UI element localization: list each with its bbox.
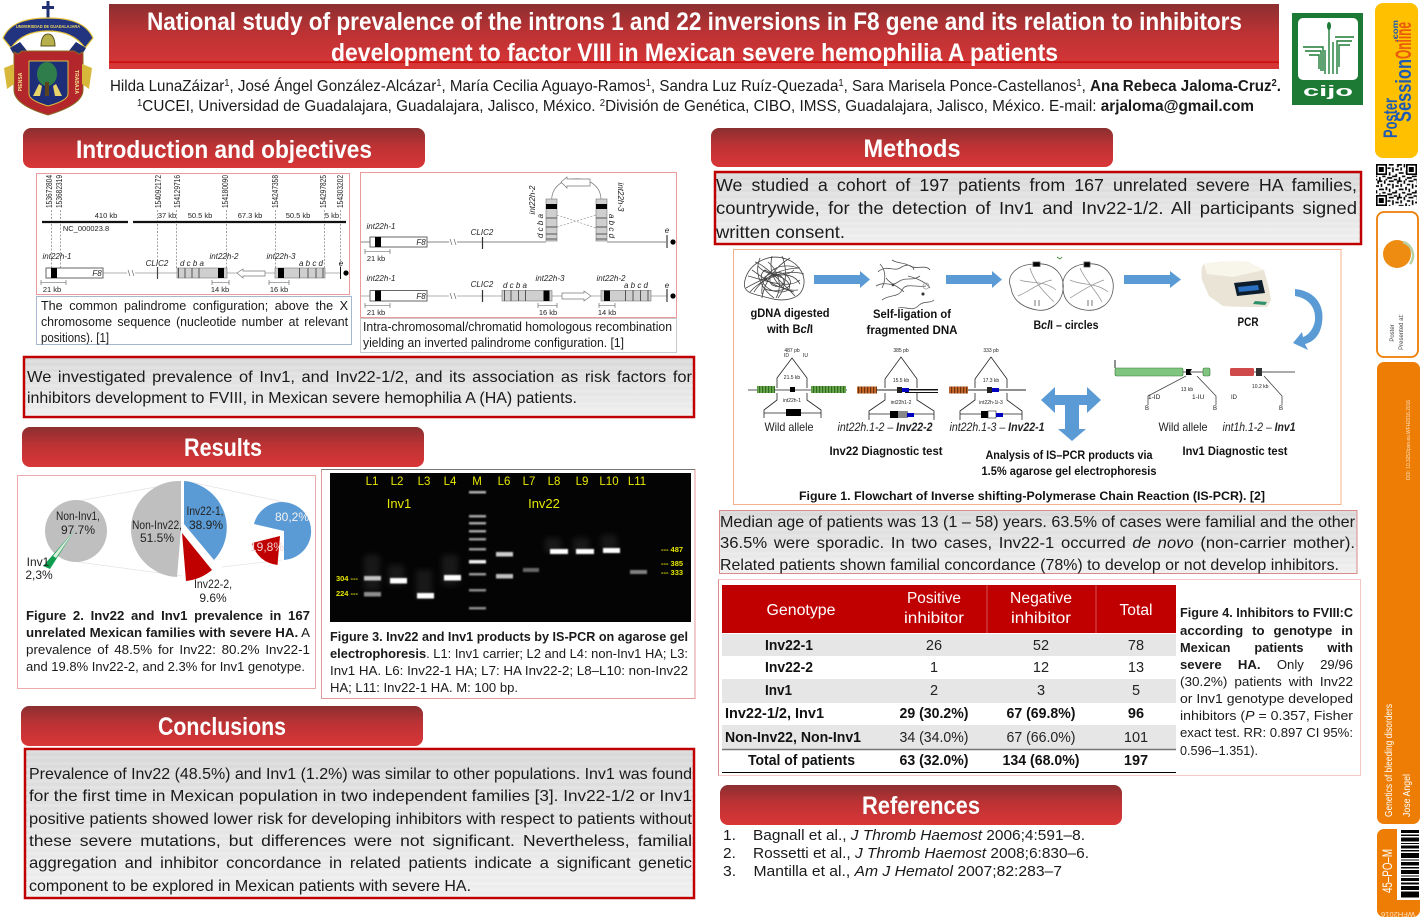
diagram labels: Analysis of IS–PCR products via <box>986 448 1153 462</box>
authors and affiliations: 1 <box>224 78 230 89</box>
figure 2 caption: Figure 2. Inv22 and Inv1 prevalence in 167 <box>26 608 310 623</box>
figure 4 caption: severe HA. Only 29/96 <box>1180 658 1353 672</box>
figure 1 panel: IS-PCR flowchart <box>734 250 1341 504</box>
tangled gDNA <box>744 256 804 300</box>
nucleotide positions: 153682319 <box>55 175 64 208</box>
diagram: Inv1 wild allele: 1-ID <box>1148 394 1161 401</box>
figure: common palindrome configuration: d c b a <box>180 259 205 268</box>
diagram: Inv22 wild allele: 487 pb <box>784 348 800 354</box>
objectives box: We investigated prevalence of Inv1, and Inv22-1/2, and its association as risk factors for <box>27 369 693 386</box>
figure: common palindrome configuration: F8 <box>92 269 102 278</box>
figure: common palindrome configuration: CLIC2 <box>146 259 169 268</box>
step labels: Self-ligation of <box>873 307 952 321</box>
figure 4 caption: according to genotype in <box>1180 624 1353 638</box>
figure 3 caption <box>330 629 688 695</box>
nucleotide positions: 154092172 <box>154 175 163 208</box>
heading: Methods <box>711 128 1113 167</box>
diagram: Inv22 wild allele: 21.5 kb <box>784 375 800 381</box>
gel image: L8 <box>548 476 560 488</box>
fragmented DNA <box>876 260 934 309</box>
sidebar: session information: DOI: 10.3252/pso.eu.WFH2016.2016 <box>1406 400 1412 480</box>
gel image: --- 385 <box>661 559 683 568</box>
pie: Inv1 prevalence: Non-Inv1, <box>56 509 100 523</box>
caption: common palindrome: chromosome sequence (nucleotide number at relevant <box>41 315 349 329</box>
figure: inverted palindrome recombination: 21 kb <box>367 254 385 263</box>
figure 4 caption: Mexican patients with <box>1180 641 1353 655</box>
figure 4 caption: exact test. RR: 0.897 CI 95%: <box>1180 726 1353 740</box>
methods box: written consent. <box>715 222 845 242</box>
badge: PosterSessionOnline <box>1375 3 1418 158</box>
badge: PosterSessionOnline: Session <box>1391 59 1416 122</box>
figure: common palindrome configuration: int22h-3 <box>267 252 296 261</box>
heading: Results <box>22 427 424 467</box>
gel image: 224 --- <box>336 589 359 598</box>
figure: inverted palindrome recombination: 14 kb <box>598 308 616 317</box>
table rows: 78 <box>1128 638 1144 654</box>
gel image: Inv22 <box>528 496 560 511</box>
authors and affiliations: 1 <box>436 78 442 89</box>
caption: inverted palindrome: Intra-chromosomal/chromatid homologous recombination <box>363 320 672 334</box>
reference list: 3. Mantilla et al., Am J Hematol 2007;82:283–7 <box>723 863 1062 880</box>
table rows: Inv1 <box>765 683 792 699</box>
gel image: L9 <box>576 476 588 488</box>
figure: inverted palindrome recombination <box>360 172 676 318</box>
table rows: Total of patients <box>748 753 855 769</box>
table rows: 26 <box>926 638 942 654</box>
table rows: 13 <box>1128 660 1144 676</box>
diagram labels: Inv22 Diagnostic test <box>830 444 942 458</box>
table header <box>722 585 1176 633</box>
table header: Genotype <box>766 602 836 619</box>
pie: Inv22 subtypes: 80,2% <box>275 510 309 524</box>
gel image: L10 <box>599 476 619 488</box>
logo: Universidad de Guadalajara shield <box>3 1 93 115</box>
figure 3 caption: Figure 3. Inv22 and Inv1 products by IS-PCR on agarose gel <box>330 629 688 644</box>
table rows: 29 (30.2%) <box>900 706 969 722</box>
pie: Inv1 prevalence: Inv1 <box>27 555 50 569</box>
diagram: Inv1 inverted: B <box>1279 406 1283 412</box>
diagram labels: int22h.1-3 – Inv22-1 <box>950 420 1045 434</box>
figure: common palindrome configuration: 21 kb <box>43 285 61 294</box>
authors and affiliations: 2 <box>600 98 606 109</box>
PCR machine <box>1201 261 1271 307</box>
figure: inverted palindrome recombination: int22h-2 <box>597 274 626 283</box>
figure: common palindrome configuration: 50.5 kb <box>286 211 310 220</box>
heading: Methods: Methods <box>864 135 960 163</box>
methods box: countrywide, for the detection of Inv1 and Inv22-1/2. All participants signed <box>716 198 1357 218</box>
table rows: 101 <box>1124 730 1148 746</box>
figure: inverted palindrome recombination: 16 kb <box>539 308 557 317</box>
nucleotide positions: 154180090 <box>221 175 230 208</box>
nucleotide positions: 154247358 <box>271 175 280 208</box>
logo: Universidad de Guadalajara shield: PIENSA <box>18 72 24 91</box>
figure 2 caption: and 19.8% Inv22-2, and 2.3% for Inv1 genotype. <box>26 659 305 674</box>
authors and affiliations: Ana Rebeca Jaloma-Cruz <box>1090 78 1272 95</box>
figure: inverted palindrome recombination: F8 <box>416 238 426 247</box>
nucleotide positions: 154129716 <box>173 175 182 208</box>
figure: inverted palindrome recombination: a b c d <box>607 214 616 239</box>
figure 4 caption: (30.2%) patients with Inv22 <box>1180 675 1353 689</box>
table rows: 3 <box>1037 683 1045 699</box>
figure 3 caption: electrophoresis. L1: Inv1 carrier; L2 and L4: non-Inv1 HA; L3: <box>330 646 688 661</box>
table rows: 197 <box>1124 753 1148 769</box>
table rows <box>722 634 1176 772</box>
pie: Inv22 prevalence <box>131 481 232 605</box>
diagram: Inv22 wild allele <box>748 348 847 418</box>
figure: inverted palindrome recombination: 21 kb <box>367 308 385 317</box>
figure 3 caption: Inv1 HA. L6: Inv22-1 HA; L7: HA Inv22-2; L8–L10: non-Inv22 <box>330 663 688 678</box>
authors and affiliations: , Sandra Luz Ruíz-Quezada <box>651 78 838 95</box>
gel image: L7 <box>523 476 535 488</box>
table rows: 67 (69.8%) <box>1006 706 1076 722</box>
pie: Inv22 subtypes: 19,8% <box>250 540 284 554</box>
gel image <box>330 473 691 622</box>
table header: Positive <box>907 590 961 607</box>
figure 4 caption <box>1180 606 1353 758</box>
figure 3 caption: HA; L11: Inv22-1 HA. M: 100 bp. <box>330 680 518 695</box>
pie: Inv1 prevalence: 2,3% <box>25 568 53 582</box>
badge: poster presented at <box>1377 212 1418 357</box>
step labels: with BclI <box>766 322 813 336</box>
figure 4 caption: Figure 4. Inhibitors to FVIII:C <box>1180 606 1353 620</box>
badge: PosterSessionOnline: Poster <box>1381 98 1402 138</box>
diagram: Inv22 wild allele: IU <box>803 353 808 359</box>
table rows: 12 <box>1033 660 1049 676</box>
caption: common palindrome: positions). [1] <box>41 331 109 345</box>
table rows: 2 <box>930 683 938 699</box>
figure 4 panel: genotype table <box>718 580 1360 776</box>
sidebar: poster code and barcode: WFH2016 <box>1381 910 1415 917</box>
pie: Inv22 prevalence: Inv22-2, <box>194 577 232 591</box>
figure: inverted palindrome recombination: F8 <box>416 292 426 301</box>
pie: Inv22 prevalence: 9.6% <box>199 591 227 605</box>
patient summary box <box>720 510 1357 574</box>
sidebar: session information <box>1377 362 1420 824</box>
diagram labels: int1h.1-2 – Inv1 <box>1222 420 1296 434</box>
arrow: T-shaped analysis arrow <box>1041 387 1101 441</box>
gel image: L1 <box>366 476 378 488</box>
diagram: Inv1 wild allele: B <box>1213 406 1217 412</box>
table rows: Inv22-1 <box>765 638 813 654</box>
authors and affiliations: arjaloma@gmail.com <box>1101 98 1254 115</box>
arrow: ligation to circles <box>946 271 1002 288</box>
logo: CIBO <box>1292 13 1363 105</box>
figure: common palindrome configuration: 16 kb <box>270 285 288 294</box>
figure 2 caption: unrelated Mexican families with severe HA. A <box>26 625 310 640</box>
objectives box: inhibitors development to FVIII, in Mexican severe hemophilia A (HA) patients. <box>27 390 577 407</box>
methods box <box>715 172 1361 244</box>
pie: Inv22 prevalence: Inv22-1, <box>186 504 224 518</box>
figure: inverted palindrome recombination: int22h-2 <box>528 185 537 214</box>
pie: Inv22 prevalence: 51.5% <box>140 531 174 545</box>
diagram: Inv22-2 <box>857 348 938 420</box>
diagram: Inv1 wild allele: 1-IU <box>1192 394 1205 401</box>
authors and affiliations: Hilda LunaZáizar <box>110 78 231 95</box>
heading: Results: Results <box>184 434 262 462</box>
table rows: Inv22-2 <box>765 660 813 676</box>
pie: Inv22 subtypes <box>250 502 311 565</box>
table rows: 67 (66.0%) <box>1006 730 1076 746</box>
nucleotide positions: 154303202 <box>336 175 345 208</box>
figure: inverted palindrome recombination: e <box>665 226 670 235</box>
diagram labels: Wild allele <box>764 420 814 434</box>
diagram: Inv22-1 <box>949 348 1026 420</box>
figure: inverted palindrome recombination: int22h-1 <box>367 222 395 231</box>
figure: common palindrome configuration: int22h-1 <box>43 252 71 261</box>
figure: inverted palindrome recombination: CLIC2 <box>471 280 494 289</box>
logo: CIBO: cijo <box>1303 83 1353 100</box>
figure: common palindrome configuration: 5 kb <box>325 211 339 220</box>
logo: Universidad de Guadalajara shield: TRABAJA <box>73 70 79 94</box>
table rows: 52 <box>1033 638 1049 654</box>
gel image: M <box>472 476 482 488</box>
gel image: L6 <box>498 476 510 488</box>
heading: Introduction and objectives: Introduction and objectives <box>76 136 372 164</box>
figure: common palindrome configuration: 37 kb <box>158 211 176 220</box>
heading: Conclusions: Conclusions <box>158 713 286 741</box>
conclusions box: Prevalence of Inv22 (48.5%) and Inv1 (1.2%) was similar to other populations. Inv1 was found <box>29 766 692 783</box>
authors and affiliations: 1 <box>1076 78 1082 89</box>
conclusions box: positive patients showed lower risk for developing inhibitors with respect to patients without <box>29 811 693 828</box>
QR code <box>1376 164 1417 206</box>
diagram: Inv22-2: 385 pb <box>893 348 909 354</box>
gel image: 304 --- <box>336 574 359 583</box>
diagram: Inv22-1: 333 pb <box>983 348 999 354</box>
step labels: BclI – circles <box>1034 318 1099 332</box>
table rows: 34 (34.0%) <box>900 730 968 746</box>
gel image: --- 487 <box>661 545 683 554</box>
title banner <box>109 4 1279 69</box>
conclusions box: these severe mutations, but differences were not significant. Nevertheless, familial <box>29 833 692 850</box>
nucleotide positions: 153672804 <box>45 175 54 208</box>
step labels: fragmented DNA <box>866 323 958 337</box>
diagram labels: int22h.1-2 – Inv22-2 <box>838 420 933 434</box>
BclI circles <box>1010 257 1113 310</box>
gel image: --- 333 <box>661 568 683 577</box>
figure: common palindrome configuration: e <box>339 259 344 268</box>
table header: Negative <box>1010 590 1072 607</box>
figure 1 caption: Figure 1. Flowchart of Inverse shifting-Polymerase Chain Reaction (IS-PCR). [2] <box>799 489 1265 503</box>
figure: common palindrome configuration: 67.3 kb <box>238 211 262 220</box>
table rows: Non-Inv22, Non-Inv1 <box>725 730 861 746</box>
authors and affiliations: 1 <box>646 78 651 89</box>
conclusions box: component to be explored in Mexican patients with severe HA. <box>29 878 471 895</box>
diagram: Inv22-1: int22h-1i-3 <box>979 400 1003 406</box>
diagram labels <box>764 420 1296 478</box>
figure: common palindrome configuration: NC_000023.8 <box>63 224 109 233</box>
figure: inverted palindrome recombination: int22h-1 <box>367 274 395 283</box>
badge: poster presented at: Poster <box>1390 324 1396 342</box>
diagram: Inv22-2: 15.5 kb <box>893 378 909 384</box>
figure 4 caption: 0.596–1.351). <box>1180 744 1258 758</box>
diagram: Inv1 wild allele <box>1115 360 1217 412</box>
figure: common palindrome configuration <box>36 174 350 294</box>
title banner: National study of prevalence of the introns 1 and 22 inversions in F8 gene and its relation to inhibitors <box>147 8 1242 36</box>
figure: common palindrome configuration: 14 kb <box>211 285 229 294</box>
sidebar: session information: Jose Angel <box>1402 774 1413 817</box>
figure 4 caption: or Inv1 genotype developed <box>1180 692 1353 706</box>
gel image: L3 <box>418 476 430 488</box>
conclusions box <box>25 749 694 898</box>
reference list: 1. Bagnall et al., J Thromb Haemost 2006;4:591–8. <box>723 827 1085 844</box>
figure 2 caption: prevalence of 48.5% for Inv22: 80.2% Inv22-1 <box>26 642 310 657</box>
table header: inhibitor <box>904 610 964 627</box>
step labels <box>750 306 1259 337</box>
authors and affiliations: 2 <box>1272 78 1277 89</box>
conclusions box: for the first time in Mexican population in two independent families [3]. Inv22-1/2 or Inv1 <box>29 788 692 805</box>
figure 2 caption <box>26 608 310 674</box>
patient summary box: Median age of patients was 13 (1 – 58) years. 63.5% of cases were familial and the other <box>720 514 1356 531</box>
figure: common palindrome configuration: a b c d <box>299 259 324 268</box>
gel image: L11 <box>628 476 646 488</box>
authors and affiliations: 1 <box>137 98 143 109</box>
caption: inverted palindrome: yielding an inverted palindrome configuration. [1] <box>363 336 624 350</box>
authors and affiliations: División de Genética, CIBO, IMSS, Guadalajara, Jalisco, México. E-mail: <box>605 98 1101 115</box>
patient summary box: Related patients shown familial concordance (78%) to develop or not develop inhibitors. <box>720 557 1339 574</box>
sidebar: session information: Genetics of bleeding disorders <box>1384 704 1395 817</box>
heading: Conclusions <box>21 706 423 746</box>
step labels: gDNA digested <box>750 306 830 320</box>
authors and affiliations: , <box>1082 78 1090 95</box>
pie: Inv1 prevalence <box>25 500 107 582</box>
arrow: digestion to ligation <box>814 271 870 288</box>
figure 4 caption: inhibitors ( P = 0.357, Fisher <box>1180 709 1353 723</box>
figure: inverted palindrome recombination: CLIC2 <box>471 228 494 237</box>
diagram: Inv1 wild allele: 13 kb <box>1181 387 1193 393</box>
badge: poster presented at: Presented at: <box>1399 314 1405 350</box>
gel image: Inv1 <box>387 496 411 511</box>
conclusions box: aggregation and inhibitor concordance in related patients indicate a significant genetic <box>29 855 692 872</box>
reference list: 2. Rossetti et al., J Thromb Haemost 2008;6:830–6. <box>723 845 1089 862</box>
authors and affiliations: 1 <box>838 78 844 89</box>
sidebar: poster code and barcode: 45–PO–M <box>1380 849 1395 893</box>
objectives box <box>24 357 694 417</box>
sidebar: poster code and barcode <box>1377 829 1420 917</box>
table rows: 5 <box>1132 683 1140 699</box>
figure 2 panel: pie charts <box>18 476 316 688</box>
reference list <box>723 827 1089 880</box>
diagram: Inv22-1: 17.3 kb <box>983 378 999 384</box>
step labels: PCR <box>1238 315 1259 329</box>
methods box: We studied a cohort of 197 patients from 167 unrelated severe HA families, <box>716 175 1357 195</box>
authors and affiliations: , Sara Marisela Ponce-Castellanos <box>844 78 1076 95</box>
curved arrow to analysis <box>1293 289 1323 350</box>
gel image: L4 <box>444 476 457 488</box>
table rows: 1 <box>930 660 938 676</box>
table rows: 134 (68.0%) <box>1002 753 1080 769</box>
pie: Inv1 prevalence: 97.7% <box>61 523 95 537</box>
heading: References: References <box>862 792 980 820</box>
authors and affiliations <box>110 76 1281 115</box>
title banner: development to factor VIII in Mexican severe hemophilia A patients <box>331 39 1058 67</box>
table header: inhibitor <box>1011 610 1071 627</box>
caption: common palindrome <box>36 296 352 345</box>
figure: common palindrome configuration: 410 kb <box>95 211 117 220</box>
caption: common palindrome: The common palindrome configuration; above the X <box>41 299 349 313</box>
table header: Total <box>1120 602 1152 619</box>
diagram: Inv22 wild allele: int22h-1 <box>783 398 801 404</box>
diagram: Inv1 inverted <box>1230 368 1295 412</box>
figure: inverted palindrome recombination: a b c d <box>624 281 649 290</box>
badge: PosterSessionOnline: .com <box>1391 20 1400 42</box>
heading: References <box>720 785 1122 825</box>
nucleotide positions <box>45 175 345 208</box>
figure: common palindrome configuration: 50.5 kb <box>188 211 212 220</box>
pie: Inv22 prevalence: Non-Inv22, <box>132 518 182 532</box>
diagram labels: 1.5% agarose gel electrophoresis <box>982 464 1157 478</box>
figure 3 panel: agarose gel <box>322 470 695 698</box>
figure: inverted palindrome recombination: e <box>665 281 670 290</box>
authors and affiliations: CUCEI, Universidad de Guadalajara, Guadalajara, Jalisco, México. <box>142 98 600 115</box>
authors and affiliations: , José Ángel González-Alcázar <box>230 76 437 95</box>
authors and affiliations: . <box>1277 78 1281 95</box>
figure: inverted palindrome recombination: d c b a <box>503 281 528 290</box>
heading: Introduction and objectives <box>23 128 425 168</box>
diagram: Inv22-2: int22h1-2 <box>891 400 912 406</box>
diagram: Inv22 wild allele: ID <box>784 353 789 359</box>
gel image: L2 <box>391 476 403 488</box>
figure: inverted palindrome recombination: int22h-3 <box>536 274 565 283</box>
diagram: Inv1 inverted: 10.2 kb <box>1252 384 1269 390</box>
figure: common palindrome configuration: int22h-2 <box>210 252 239 261</box>
nucleotide positions: 154297825 <box>319 175 328 208</box>
diagram labels: Inv1 Diagnostic test <box>1182 444 1288 458</box>
pie: Inv22 prevalence: 38.9% <box>189 518 223 532</box>
diagram: Inv1 inverted: ID <box>1231 395 1238 401</box>
figure: inverted palindrome recombination: d c b a <box>536 213 545 238</box>
figure: inverted palindrome recombination: int22h-3 <box>616 183 625 212</box>
diagram labels: Wild allele <box>1158 420 1208 434</box>
authors and affiliations: , María Cecilia Aguayo-Ramos <box>442 78 646 95</box>
logo: Universidad de Guadalajara shield: UNIVERSIDAD DE GUADALAJARA <box>16 24 81 29</box>
table rows: Inv22-1/2, Inv1 <box>725 706 824 722</box>
arrow: circles to PCR <box>1124 271 1181 288</box>
caption: inverted palindrome <box>360 318 676 352</box>
table rows: 63 (32.0%) <box>900 753 969 769</box>
table rows: 96 <box>1128 706 1144 722</box>
patient summary box: 36.5% were sporadic. In two cases, Inv22-1 occurred de novo (non-carrier mother). <box>720 535 1355 552</box>
diagram: Inv1 wild allele: B <box>1145 406 1149 412</box>
